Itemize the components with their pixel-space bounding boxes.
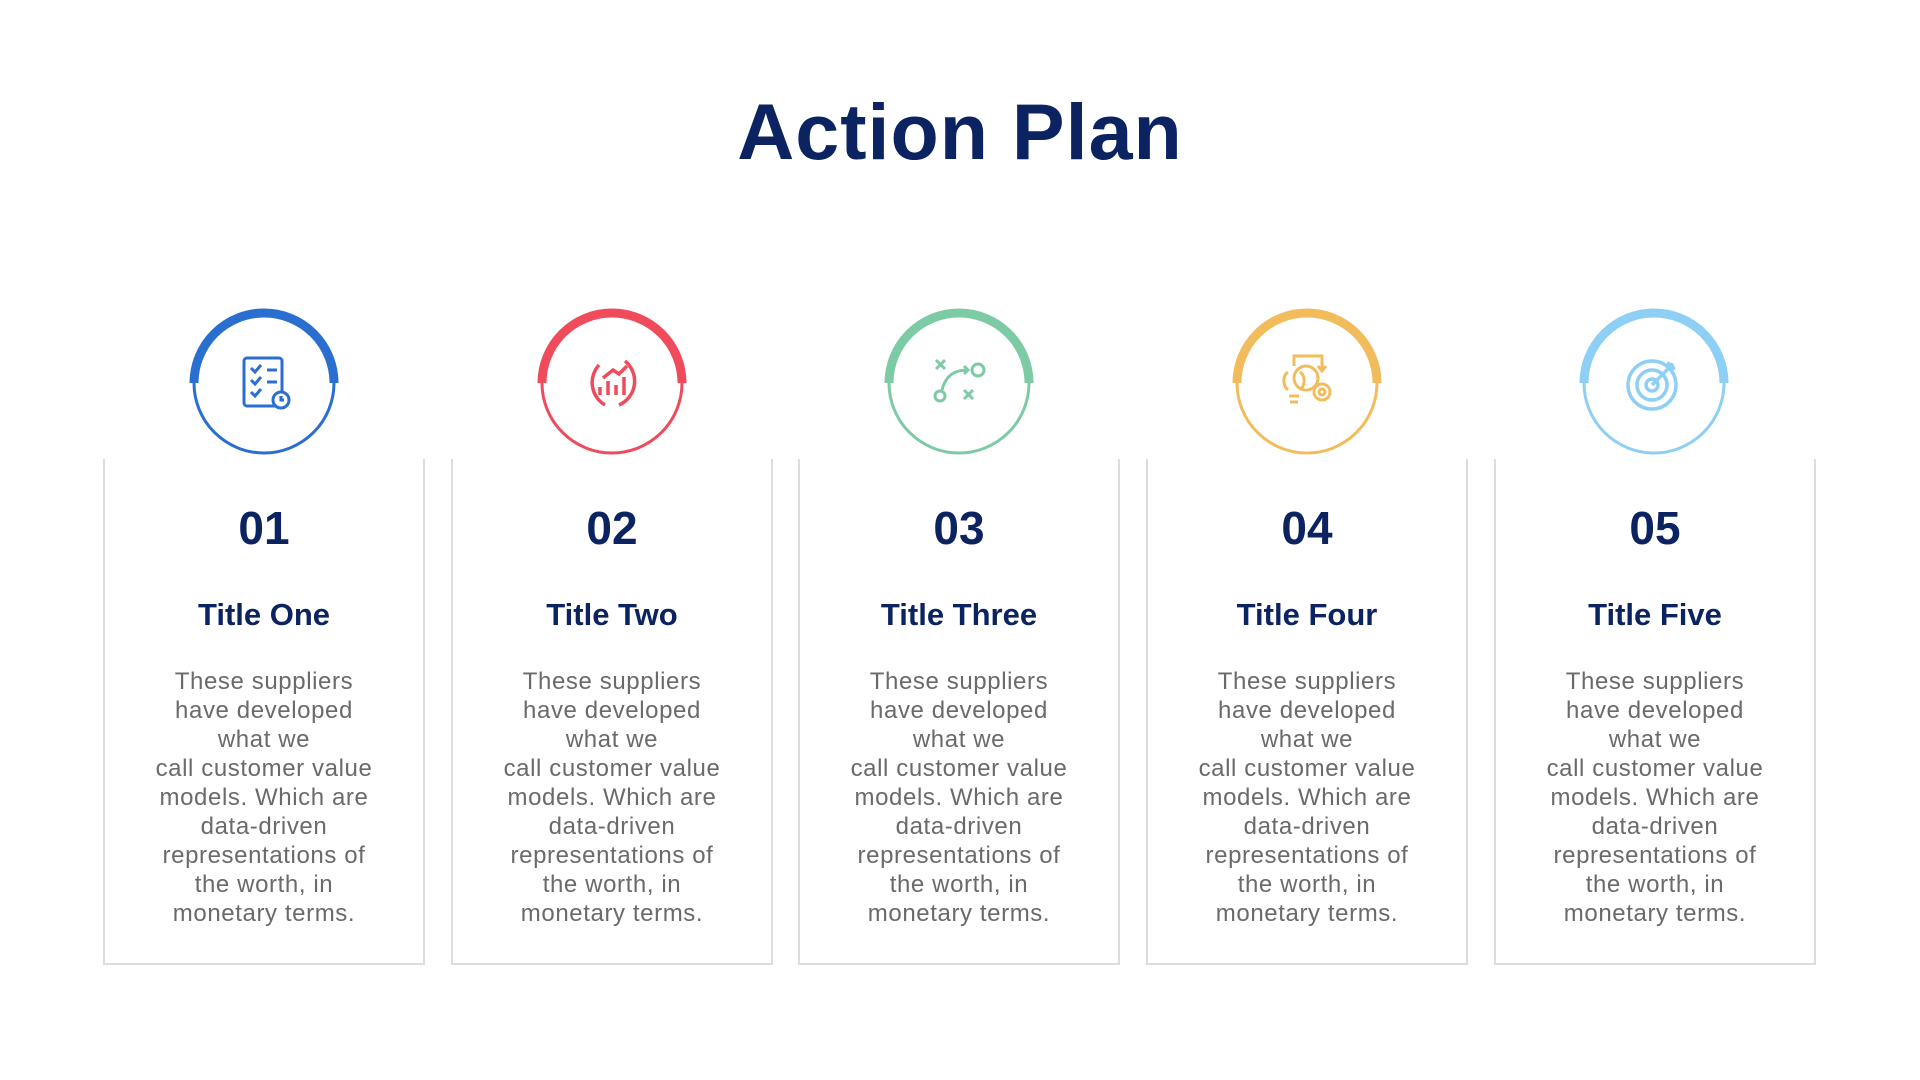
- body text: monetary terms.: [521, 900, 703, 927]
- body text: These suppliers: [1218, 668, 1396, 695]
- body text: monetary terms.: [1216, 900, 1398, 927]
- body text: what we: [566, 726, 658, 753]
- body text: the worth, in: [543, 871, 681, 898]
- body text: [1547, 668, 1763, 927]
- card title: Title Two: [546, 597, 678, 632]
- body text: models. Which are: [1551, 784, 1759, 811]
- number: 03: [933, 502, 985, 554]
- number: 02: [586, 502, 638, 554]
- body text: monetary terms.: [173, 900, 355, 927]
- number: 05: [1629, 502, 1681, 554]
- body text: models. Which are: [855, 784, 1063, 811]
- card title: Title One: [198, 597, 330, 632]
- body text: what we: [1609, 726, 1701, 753]
- number: 04: [1281, 502, 1333, 554]
- icon circle 1: checklist: [190, 308, 338, 454]
- body text: These suppliers: [870, 668, 1048, 695]
- body text: call customer value: [156, 755, 372, 782]
- body text: monetary terms.: [868, 900, 1050, 927]
- body text: data-driven: [201, 813, 327, 840]
- body text: the worth, in: [890, 871, 1028, 898]
- body text: [851, 668, 1067, 927]
- body text: models. Which are: [160, 784, 368, 811]
- body text: representations of: [511, 842, 713, 869]
- body text: the worth, in: [1586, 871, 1724, 898]
- card title: Title Five: [1588, 597, 1722, 632]
- body text: call customer value: [851, 755, 1067, 782]
- body text: what we: [1261, 726, 1353, 753]
- body text: what we: [218, 726, 310, 753]
- icon circle 3: strategy: [884, 308, 1034, 454]
- body text: call customer value: [1199, 755, 1415, 782]
- body text: what we: [913, 726, 1005, 753]
- icon circle 2: growth cycle: [538, 308, 686, 454]
- body text: call customer value: [1547, 755, 1763, 782]
- body text: data-driven: [896, 813, 1022, 840]
- body text: have developed: [1566, 697, 1744, 724]
- card title: Title Four: [1237, 597, 1377, 632]
- body text: These suppliers: [523, 668, 701, 695]
- body text: These suppliers: [1566, 668, 1744, 695]
- body text: models. Which are: [1203, 784, 1411, 811]
- card 3: [798, 459, 1120, 965]
- body text: representations of: [163, 842, 365, 869]
- body text: monetary terms.: [1564, 900, 1746, 927]
- icon circle 4: idea: [1232, 308, 1382, 454]
- body text: models. Which are: [508, 784, 716, 811]
- icon circle 5: target: [1580, 308, 1728, 454]
- body text: the worth, in: [195, 871, 333, 898]
- number: 01: [238, 502, 290, 554]
- body text: have developed: [1218, 697, 1396, 724]
- card 4: [1146, 459, 1468, 965]
- body text: representations of: [1554, 842, 1756, 869]
- card 1: [103, 459, 425, 965]
- body text: representations of: [858, 842, 1060, 869]
- title: Action Plan: [737, 87, 1183, 176]
- body text: data-driven: [1244, 813, 1370, 840]
- body text: data-driven: [1592, 813, 1718, 840]
- card title: Title Three: [881, 597, 1037, 632]
- card 5: [1494, 459, 1816, 965]
- body text: have developed: [523, 697, 701, 724]
- body text: have developed: [175, 697, 353, 724]
- body text: These suppliers: [175, 668, 353, 695]
- body text: [156, 668, 372, 927]
- body text: call customer value: [504, 755, 720, 782]
- body text: representations of: [1206, 842, 1408, 869]
- card 2: [451, 459, 773, 965]
- body text: data-driven: [549, 813, 675, 840]
- body text: [1199, 668, 1415, 927]
- body text: have developed: [870, 697, 1048, 724]
- body text: [504, 668, 720, 927]
- body text: the worth, in: [1238, 871, 1376, 898]
